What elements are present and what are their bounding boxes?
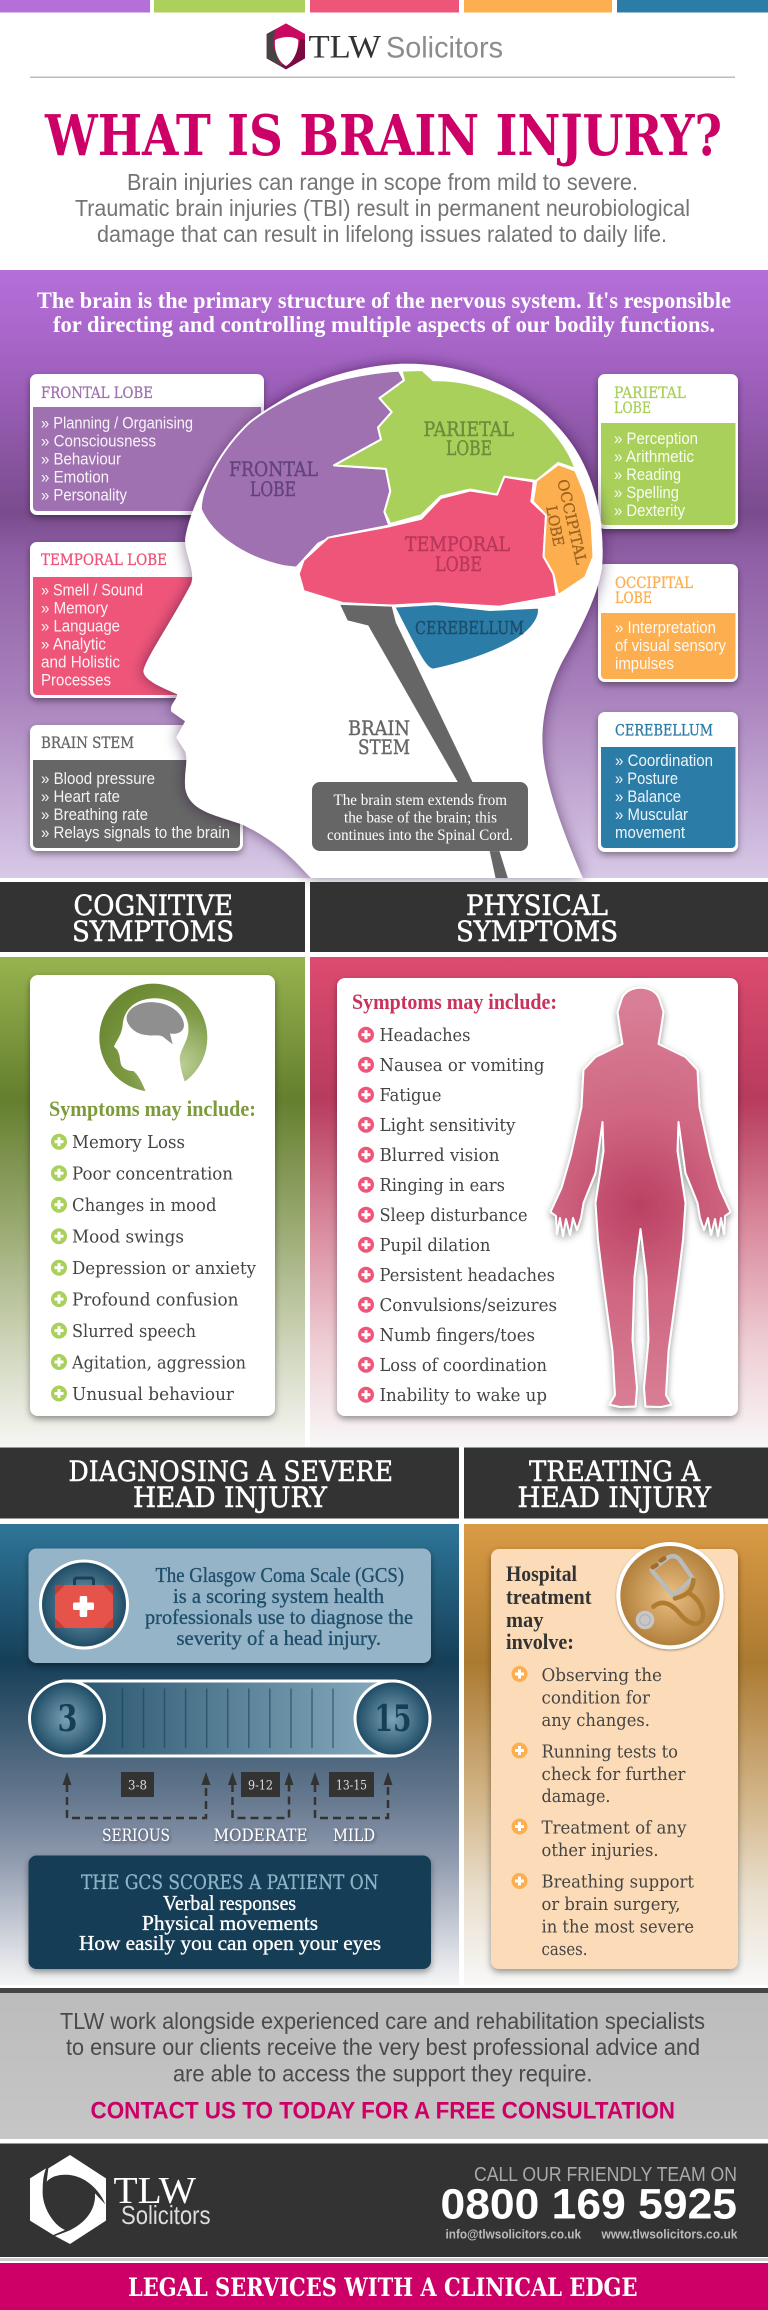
list: cognitive symptoms: Unusual behaviour bbox=[72, 1384, 234, 1405]
section header: physical symptoms bbox=[310, 882, 768, 952]
icon: first aid kit bbox=[40, 1561, 128, 1648]
list: physical symptoms: Numb fingers/toes bbox=[380, 1325, 535, 1346]
list: cognitive symptoms: Memory Loss bbox=[72, 1132, 185, 1153]
temporal lobe bbox=[299, 477, 557, 607]
text: hospital treatment may involve: treatment bbox=[506, 1584, 592, 1609]
strapline bbox=[0, 2263, 768, 2310]
list: physical symptoms: Convulsions/seizures bbox=[380, 1295, 557, 1316]
panel: temporal lobe box: » Memory bbox=[41, 598, 108, 618]
section header: cognitive symptoms: COGNITIVE bbox=[74, 889, 233, 922]
list: physical symptoms: Blurred vision bbox=[380, 1145, 500, 1166]
panel: parietal lobe box: LOBE bbox=[614, 399, 651, 417]
panel: contact message: TLW work alongside experienced care and rehabilitation specialists bbox=[60, 2008, 705, 2034]
list: physical symptoms: Inability to wake up bbox=[380, 1385, 547, 1406]
list: physical symptoms: Persistent headaches bbox=[380, 1265, 555, 1286]
panel: temporal lobe box: » Smell / Sound bbox=[41, 580, 143, 600]
list: treatments: cases. bbox=[542, 1939, 588, 1960]
list: treatments: condition for bbox=[542, 1688, 650, 1708]
brain intro text: The brain is the primary structure of the nervous system. It's responsible bbox=[37, 288, 731, 313]
text: hospital treatment may involve: may bbox=[506, 1607, 544, 1632]
list: treatments: Breathing support bbox=[542, 1872, 695, 1892]
icon: shield hexagon bbox=[267, 23, 305, 69]
icon: head with brain bbox=[99, 984, 207, 1093]
contact details bbox=[440, 2164, 738, 2242]
panel: cerebellum box: » Balance bbox=[615, 787, 681, 806]
callout: gcs scores: Verbal responses bbox=[163, 1891, 296, 1915]
list: physical symptoms bbox=[358, 1025, 557, 1406]
list: physical symptoms: Sleep disturbance bbox=[380, 1205, 528, 1226]
panel: contact message bbox=[0, 1993, 768, 2139]
score brackets: 13-15 bbox=[336, 1778, 367, 1794]
strapline: LEGAL SERVICES WITH A CLINICAL EDGE bbox=[128, 2273, 638, 2302]
list: physical symptoms: Pupil dilation bbox=[380, 1235, 491, 1256]
panel: parietal lobe box: » Dexterity bbox=[614, 501, 685, 520]
panel: occipital lobe box: » Interpretation bbox=[615, 618, 716, 637]
text: hospital treatment may involve: Hospital bbox=[506, 1561, 577, 1586]
callout: gcs scores bbox=[28, 1856, 431, 1969]
section header: cognitive symptoms: SYMPTOMS bbox=[72, 915, 234, 948]
section header: physical symptoms: SYMPTOMS bbox=[456, 915, 618, 948]
panel: occipital lobe box: LOBE bbox=[615, 589, 652, 607]
list: cognitive symptoms: Poor concentration bbox=[72, 1164, 233, 1184]
panel: brain stem box: » Blood pressure bbox=[41, 769, 155, 788]
list: cognitive symptoms: Depression or anxiety bbox=[72, 1258, 257, 1279]
callout: brain stem: The brain stem extends from bbox=[334, 792, 508, 809]
list: cognitive symptoms: Agitation, aggression bbox=[71, 1352, 246, 1373]
brain stem shape bbox=[340, 605, 508, 878]
intro text: damage that can result in lifelong issues ralated to daily life. bbox=[97, 221, 667, 247]
list: cognitive symptoms: Profound confusion bbox=[72, 1289, 239, 1310]
list: treatments: other injuries. bbox=[542, 1840, 658, 1861]
occipital lobe: OCCIPITAL bbox=[553, 477, 590, 566]
panel: frontal lobe box: » Emotion bbox=[41, 468, 109, 486]
header logo bbox=[267, 23, 503, 69]
panel: parietal lobe box: » Reading bbox=[614, 465, 681, 484]
parietal lobe bbox=[334, 370, 575, 524]
occipital lobe bbox=[533, 464, 594, 595]
list: treatments: Observing the bbox=[542, 1665, 662, 1686]
contact details: info@tlwsolicitors.co.uk bbox=[446, 2226, 582, 2242]
score labels: MODERATE bbox=[214, 1826, 308, 1846]
list: cognitive symptoms: Slurred speech bbox=[72, 1321, 196, 1342]
frontal lobe bbox=[201, 371, 404, 568]
panel: the brain bbox=[0, 270, 768, 878]
panel: frontal lobe box: » Consciousness bbox=[41, 432, 156, 450]
list: physical symptoms: Nausea or vomiting bbox=[380, 1055, 544, 1076]
panel: cerebellum box: CEREBELLUM bbox=[615, 722, 713, 740]
panel: diagnosing bbox=[0, 1524, 459, 1985]
panel: temporal lobe box bbox=[30, 542, 264, 698]
heading: symptoms may include: Symptoms may include: bbox=[352, 989, 557, 1014]
contact details: CALL OUR FRIENDLY TEAM ON bbox=[474, 2164, 737, 2186]
section header: diagnosing a severe head injury bbox=[0, 1448, 459, 1518]
list: physical symptoms: Light sensitivity bbox=[380, 1115, 516, 1136]
panel: brain stem box bbox=[30, 725, 243, 851]
panel: brain stem box: » Relays signals to the brain bbox=[41, 823, 230, 842]
icon: stethoscope bbox=[618, 1544, 722, 1647]
list: treatments: check for further bbox=[542, 1764, 686, 1785]
panel: treating bbox=[464, 1524, 768, 1985]
panel: brain stem box: » Heart rate bbox=[41, 787, 120, 806]
panel: cognitive symptoms bbox=[0, 957, 305, 1447]
callout: gcs scores: Physical movements bbox=[142, 1911, 318, 1935]
frontal lobe: LOBE bbox=[250, 477, 296, 501]
footer logo: Solicitors bbox=[121, 2200, 210, 2230]
intro text bbox=[75, 169, 690, 247]
footer panel bbox=[0, 2144, 768, 2257]
list: physical symptoms: Headaches bbox=[380, 1025, 470, 1046]
list: physical symptoms: Ringing in ears bbox=[380, 1175, 505, 1196]
list: treatments: Running tests to bbox=[542, 1742, 678, 1762]
panel: frontal lobe box: » Planning / Organising bbox=[41, 414, 193, 432]
list: cognitive symptoms bbox=[51, 1132, 257, 1405]
score brackets: 9-12 bbox=[248, 1778, 273, 1794]
panel: parietal lobe box: » Spelling bbox=[614, 483, 679, 502]
section header: diagnosing a severe head injury: DIAGNOSING A SEVERE bbox=[68, 1455, 393, 1488]
panel: temporal lobe box: TEMPORAL LOBE bbox=[41, 551, 167, 569]
section header: diagnosing a severe head injury: HEAD INJURY bbox=[133, 1481, 327, 1514]
chart: glasgow coma scale bar: 15 bbox=[374, 1698, 412, 1740]
list: physical symptoms: Loss of coordination bbox=[380, 1355, 547, 1376]
list: physical symptoms: Fatigue bbox=[380, 1085, 442, 1106]
panel: contact message: to ensure our clients receive the very best professional advice and bbox=[66, 2034, 700, 2060]
text: glasgow coma scale: The Glasgow Coma Scale (GCS) bbox=[156, 1563, 404, 1587]
panel: parietal lobe box: » Perception bbox=[614, 429, 698, 448]
panel: cerebellum box: » Coordination bbox=[615, 751, 713, 770]
panel: occipital lobe box: impulses bbox=[615, 654, 674, 673]
panel: frontal lobe box: FRONTAL LOBE bbox=[41, 384, 153, 402]
panel: parietal lobe box: » Arithmetic bbox=[614, 447, 694, 466]
callout: brain stem bbox=[312, 782, 528, 851]
body silhouette bbox=[550, 988, 730, 1407]
panel: frontal lobe box: » Personality bbox=[41, 486, 127, 504]
callout: gcs scores: THE GCS SCORES A PATIENT ON bbox=[81, 1870, 378, 1894]
intro text: Traumatic brain injuries (TBI) result in permanent neurobiological bbox=[75, 195, 690, 221]
cerebellum bbox=[394, 604, 539, 670]
score labels bbox=[102, 1826, 375, 1846]
list: treatments: Treatment of any bbox=[542, 1818, 687, 1838]
footer logo bbox=[30, 2155, 211, 2244]
panel: occipital lobe box: OCCIPITAL bbox=[615, 574, 693, 592]
parietal lobe: PARIETAL bbox=[424, 417, 514, 441]
list: cognitive symptoms: Changes in mood bbox=[72, 1195, 216, 1216]
list: treatments: damage. bbox=[542, 1786, 610, 1807]
panel: temporal lobe box: » Analytic bbox=[41, 634, 106, 654]
list: treatments: any changes. bbox=[542, 1710, 650, 1731]
panel: contact message: are able to access the support they require. bbox=[173, 2060, 592, 2086]
cerebellum: CEREBELLUM bbox=[415, 618, 524, 639]
section header: treating a head injury bbox=[464, 1448, 768, 1518]
contact details: 0800 169 5925 bbox=[440, 2180, 737, 2228]
parietal lobe: LOBE bbox=[446, 436, 492, 460]
panel: temporal lobe box: and Holistic bbox=[41, 652, 120, 672]
text: glasgow coma scale: professionals use to diagnose the bbox=[145, 1605, 413, 1629]
score brackets bbox=[62, 1772, 392, 1818]
panel: temporal lobe box: » Language bbox=[41, 616, 120, 636]
panel: physical symptoms bbox=[310, 957, 768, 1447]
brain intro text bbox=[37, 288, 731, 337]
panel: cerebellum box bbox=[598, 712, 738, 852]
contact details: www.tlwsolicitors.co.uk bbox=[601, 2226, 738, 2242]
callout: gcs scores: How easily you can open your eyes bbox=[79, 1931, 381, 1955]
panel: temporal lobe box: Processes bbox=[41, 670, 111, 690]
text: hospital treatment may involve: involve: bbox=[506, 1629, 574, 1654]
chart: glasgow coma scale bar bbox=[30, 1681, 430, 1756]
section header: physical symptoms: PHYSICAL bbox=[466, 889, 608, 922]
panel: occipital lobe box bbox=[598, 564, 738, 682]
panel: occipital lobe box: of visual sensory bbox=[615, 636, 726, 655]
panel: frontal lobe box bbox=[30, 374, 264, 515]
wordmark TLW: TLW bbox=[308, 30, 382, 66]
list: treatments bbox=[512, 1665, 695, 1960]
panel: cerebellum box: » Posture bbox=[615, 769, 678, 788]
panel: parietal lobe box bbox=[598, 374, 738, 529]
list: treatments: or brain surgery, bbox=[542, 1894, 680, 1915]
panel: cerebellum box: movement bbox=[615, 823, 685, 842]
head silhouette bbox=[143, 364, 603, 878]
section header: treating a head injury: HEAD INJURY bbox=[518, 1481, 711, 1514]
brain stem label bbox=[348, 716, 410, 759]
panel: parietal lobe box: PARIETAL bbox=[614, 384, 686, 402]
list: cognitive symptoms: Mood swings bbox=[72, 1226, 184, 1248]
chart: glasgow coma scale bar: 3 bbox=[58, 1698, 78, 1740]
section header: cognitive symptoms bbox=[0, 882, 305, 952]
panel: cerebellum box: » Muscular bbox=[615, 805, 688, 824]
text: glasgow coma scale: is a scoring system health bbox=[173, 1584, 384, 1608]
section header: treating a head injury: TREATING A bbox=[529, 1455, 701, 1488]
panel: brain stem box: BRAIN STEM bbox=[41, 734, 134, 752]
score labels: SERIOUS bbox=[102, 1826, 170, 1846]
score labels: MILD bbox=[333, 1826, 375, 1846]
icon: white hexagon shield bbox=[30, 2155, 106, 2244]
text: glasgow coma scale: severity of a head injury. bbox=[176, 1626, 381, 1650]
brain diagram bbox=[201, 370, 594, 878]
occipital lobe: LOBE bbox=[542, 504, 568, 548]
footer logo: TLW bbox=[114, 2170, 196, 2212]
score brackets: 3-8 bbox=[128, 1778, 147, 1794]
list: treatments: in the most severe bbox=[542, 1916, 694, 1938]
callout: brain stem: the base of the brain; this bbox=[344, 810, 497, 826]
heading: symptoms may include: Symptoms may include: bbox=[49, 1096, 256, 1121]
panel: frontal lobe box: » Behaviour bbox=[41, 450, 121, 468]
panel: brain stem box: » Breathing rate bbox=[41, 805, 148, 824]
frontal lobe: FRONTAL bbox=[229, 457, 318, 481]
callout: brain stem: continues into the Spinal Cord. bbox=[327, 827, 513, 844]
intro text: Brain injuries can range in scope from mild to severe. bbox=[127, 169, 638, 195]
top colour bars bbox=[0, 0, 768, 12]
callout: glasgow coma scale bbox=[28, 1548, 431, 1663]
temporal lobe: LOBE bbox=[435, 552, 482, 576]
call to action: CONTACT US TO TODAY FOR A FREE CONSULTATION bbox=[90, 2098, 675, 2124]
brain stem label: STEM bbox=[358, 735, 410, 759]
wordmark Solicitors: Solicitors bbox=[386, 32, 503, 64]
temporal lobe: TEMPORAL bbox=[405, 532, 510, 556]
brain stem label: BRAIN bbox=[348, 716, 410, 740]
text: hospital treatment may involve bbox=[506, 1561, 592, 1654]
text: glasgow coma scale bbox=[145, 1563, 413, 1650]
brain intro text: for directing and controlling multiple aspects of our bodily functions. bbox=[53, 312, 715, 337]
